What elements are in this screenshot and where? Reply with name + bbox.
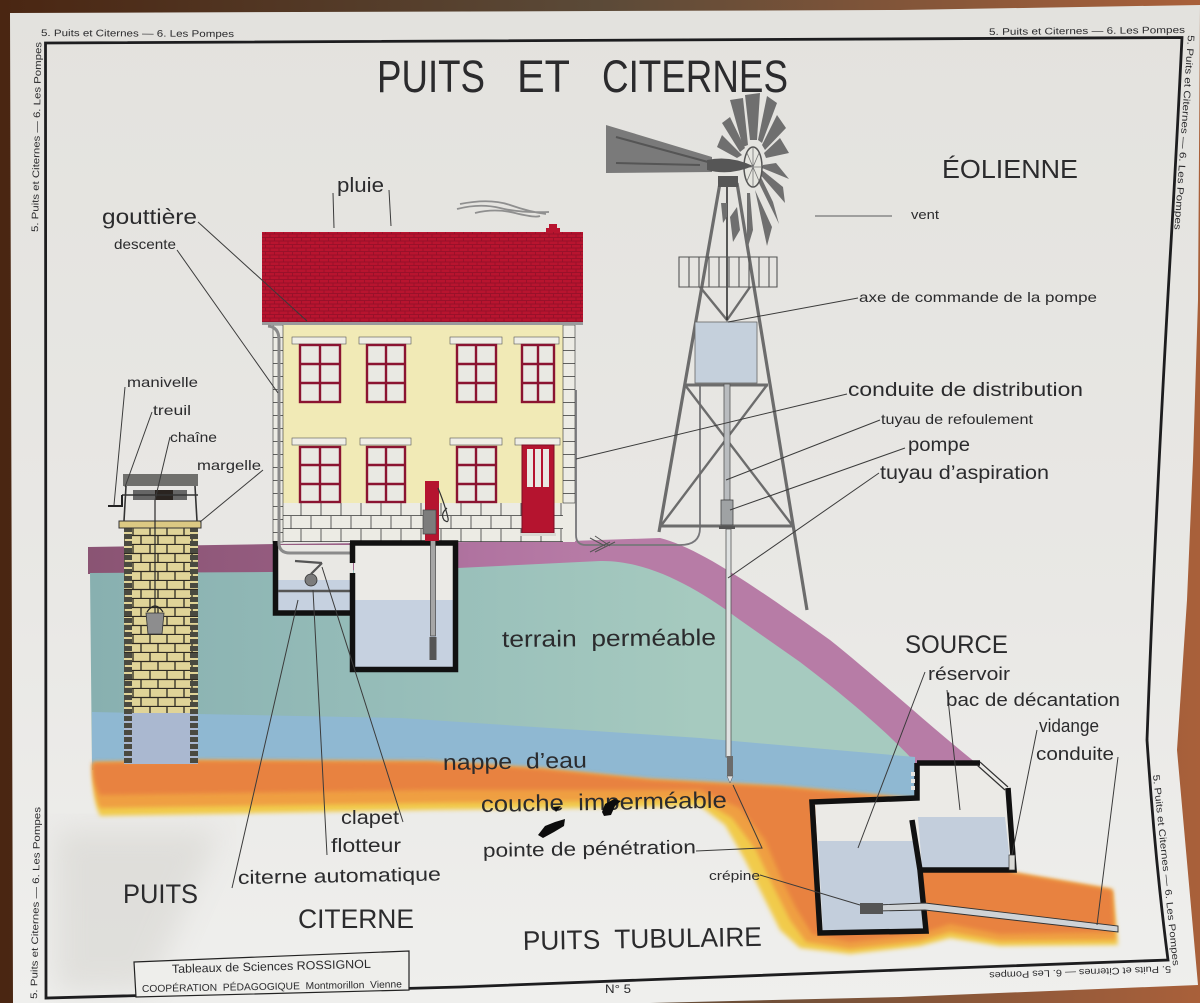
spring: source structure — [812, 762, 1118, 933]
automatic cistern tank — [275, 541, 353, 613]
label: vidange: vidange — [1039, 716, 1099, 736]
label: descente: descente — [114, 236, 176, 252]
margin caption: right lower: 5. Puits et Citernes — 6. Les Pompes — [1150, 774, 1181, 967]
publisher line 1: Tableaux de Sciences ROSSIGNOL — [172, 957, 371, 976]
upper lintels — [292, 337, 560, 445]
water table: blue — [92, 712, 915, 800]
label: vent: vent — [911, 208, 940, 222]
ink stains on paper — [538, 799, 621, 838]
margin caption: left upper: 5. Puits et Citernes — 6. Les Pompes — [30, 42, 44, 232]
label: couche imperméable: couche imperméable — [481, 787, 727, 817]
windlass — [108, 474, 198, 521]
tail vane — [606, 125, 712, 173]
pump pipe and strainer — [430, 536, 436, 660]
bucket — [146, 606, 164, 634]
roof — [262, 232, 583, 322]
float and valve — [295, 561, 322, 586]
label: crépine: crépine — [709, 868, 760, 883]
downpipe — [268, 326, 357, 553]
label: pluie: pluie — [337, 175, 384, 197]
cross-section ground layers — [88, 538, 1118, 954]
margin caption: top left: 5. Puits et Citernes — 6. Les Pompes — [41, 28, 234, 40]
door — [520, 445, 556, 536]
underground tanks — [268, 326, 456, 670]
label: pointe de pénétration: pointe de pénétration — [483, 837, 696, 862]
label: axe de commande de la pompe: axe de commande de la pompe — [859, 289, 1097, 305]
label: manivelle: manivelle — [127, 374, 198, 390]
label: gouttière: gouttière — [102, 206, 197, 229]
heading: SOURCE: SOURCE — [905, 631, 1008, 659]
label: conduite: conduite — [1036, 744, 1114, 764]
label: flotteur: flotteur — [331, 836, 402, 857]
label: treuil: treuil — [153, 402, 191, 418]
label: margelle: margelle — [197, 457, 261, 473]
walls — [273, 325, 575, 542]
drain — [1009, 855, 1015, 870]
chimney and smoke — [457, 201, 560, 232]
suction point — [727, 756, 733, 783]
shaft edge stones — [128, 527, 194, 764]
margin caption: right upper: 5. Puits et Citernes — 6. Les Pompes — [1171, 35, 1196, 230]
title: CITERNES — [602, 51, 788, 102]
impermeable layer: orange clay — [93, 761, 1118, 954]
label: terrain perméable: terrain perméable — [502, 624, 716, 652]
distribution pipe on wall — [576, 385, 700, 545]
leader lines — [114, 190, 1118, 925]
label: réservoir: réservoir — [928, 664, 1010, 684]
platform — [679, 257, 777, 287]
well shaft — [124, 527, 198, 713]
label: conduite de distribution: conduite de distribution — [848, 380, 1083, 401]
tower frame — [659, 180, 807, 610]
spring walls — [812, 763, 1014, 933]
decanting tank water — [918, 817, 1011, 868]
heading: PUITS TUBULAIRE: PUITS TUBULAIRE — [523, 922, 762, 956]
margin caption: top right: 5. Puits et Citernes — 6. Les Pompes — [989, 25, 1185, 38]
fan wheel blades — [717, 93, 789, 250]
label: chaîne: chaîne — [170, 429, 217, 445]
permeable ground: teal — [90, 561, 915, 795]
plate number: N° 5 — [605, 982, 631, 996]
label: pompe: pompe — [908, 435, 970, 456]
delivery pipe and pump cylinder — [719, 384, 735, 529]
label: clapet: clapet — [341, 808, 400, 829]
topsoil: purple band — [88, 538, 985, 775]
label: tuyau de refoulement: tuyau de refoulement — [881, 411, 1033, 427]
paper shading lower left — [55, 830, 220, 992]
suction pipe — [726, 529, 731, 757]
house — [262, 201, 700, 545]
windmill — [606, 93, 807, 783]
margin caption: bottom inverted: 5. Puits et Citernes — 6. Les Pompes — [989, 963, 1171, 980]
water tank — [695, 322, 757, 383]
main cistern — [350, 536, 456, 670]
windows — [300, 345, 554, 502]
publisher box — [134, 951, 409, 997]
reservoir water — [818, 841, 923, 931]
heading: CITERNE: CITERNE — [298, 904, 414, 934]
well coping: margelle — [119, 521, 201, 528]
outlet pipe — [860, 903, 1118, 932]
label: bac de décantation: bac de décantation — [946, 690, 1120, 710]
chain — [154, 500, 156, 614]
title — [377, 51, 788, 102]
overflow pipe — [977, 762, 1008, 790]
filter openings — [911, 772, 915, 792]
label: nappe d'eau: nappe d’eau — [443, 747, 587, 775]
spring interior — [815, 764, 1013, 933]
publisher line 2: COOPÉRATION PÉDAGOGIQUE Montmorillon Vienne — [142, 977, 402, 995]
gutter — [262, 322, 583, 325]
hand pump — [423, 481, 448, 541]
well: puits — [108, 474, 201, 764]
margin caption: left lower: 5. Puits et Citernes — 6. Les Pompes — [29, 807, 43, 999]
title: ET — [517, 51, 570, 102]
title: PUITS — [377, 51, 485, 102]
heading: PUITS: PUITS — [123, 879, 198, 909]
heading: ÉOLIENNE: ÉOLIENNE — [942, 154, 1078, 184]
hub — [707, 158, 753, 187]
label: citerne automatique: citerne automatique — [238, 864, 441, 889]
label: tuyau d'aspiration: tuyau d’aspiration — [880, 463, 1049, 484]
